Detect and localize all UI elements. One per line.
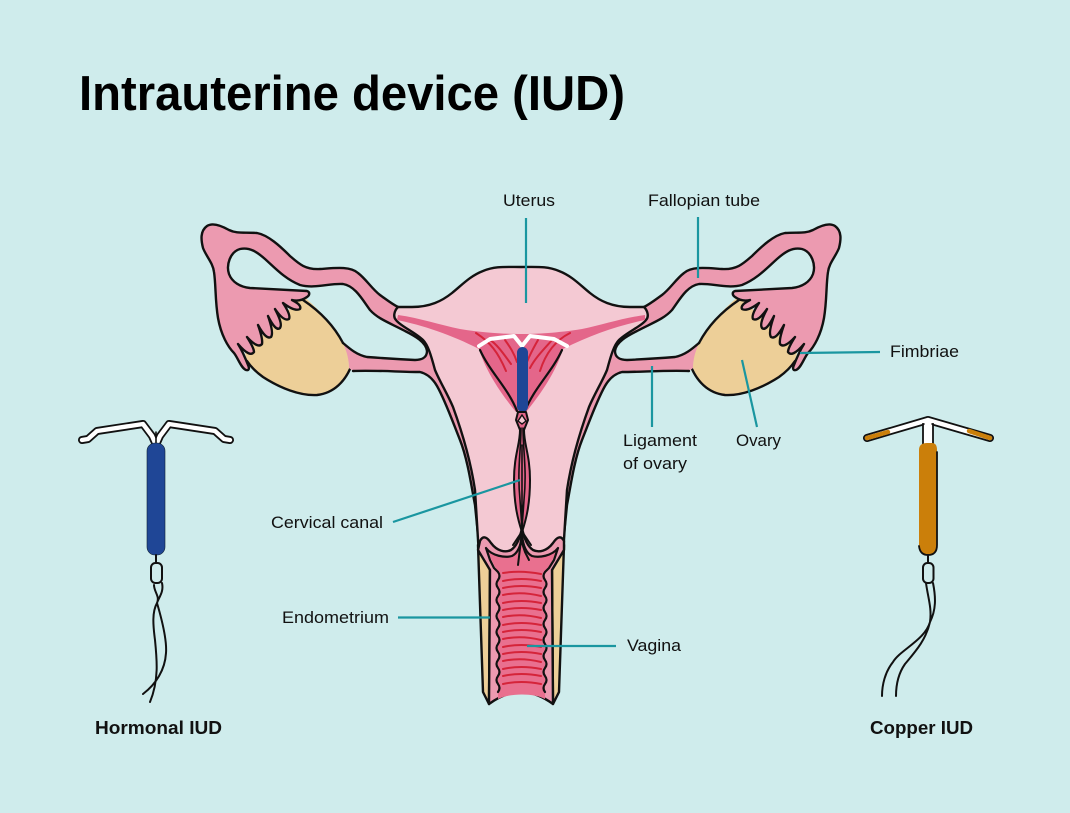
hormonal IUD in place	[479, 336, 567, 412]
cervical canal	[514, 412, 530, 535]
hormonal IUD device	[82, 424, 230, 702]
right fallopian tube, ligament and ovary	[563, 224, 840, 545]
left tan wall layer	[478, 545, 490, 704]
right tan wall layer	[552, 545, 564, 704]
label: Fimbriae: Fimbriae	[890, 343, 959, 361]
label: Ovary: Ovary	[736, 432, 782, 450]
arms white fill	[867, 420, 990, 438]
label: Cervical canal	[271, 480, 520, 532]
rod edge	[919, 452, 937, 555]
label: Vagina: Vagina	[627, 637, 682, 655]
hormone reservoir	[147, 443, 165, 555]
strings	[143, 555, 166, 702]
copper sleeves	[867, 431, 990, 438]
cavity side outlines	[480, 350, 562, 411]
label: Ligament of ovary	[623, 366, 697, 473]
stem top patch	[924, 420, 932, 428]
canal ridges outline	[486, 535, 558, 692]
label: Ligament of ovary: Ligament	[623, 432, 697, 450]
arms outline	[82, 424, 230, 445]
label: Uterus: Uterus	[503, 192, 555, 210]
uterine cavity	[397, 315, 645, 412]
copper rod	[919, 443, 937, 555]
stem	[923, 424, 933, 446]
bead	[151, 563, 162, 583]
left fallopian tube, ligament and ovary	[202, 224, 479, 545]
vaginal canal	[486, 535, 558, 699]
Hormonal IUD caption: Hormonal IUD	[95, 717, 222, 738]
label: Fallopian tube: Fallopian tube	[648, 192, 760, 210]
vaginal pink layer	[478, 528, 564, 704]
cavity red muscle lines	[476, 333, 570, 371]
label: Ovary	[736, 360, 782, 450]
anatomy diagram: uterus and ovaries	[202, 224, 840, 704]
label: Uterus	[503, 192, 555, 303]
label: Ligament of ovary: of ovary	[623, 455, 688, 473]
label: Endometrium: Endometrium	[282, 609, 389, 627]
bead	[923, 563, 934, 583]
stem	[155, 432, 157, 443]
uterus body	[394, 267, 648, 556]
Copper IUD caption: Copper IUD	[870, 717, 973, 738]
copper IUD device	[867, 420, 990, 696]
red rugae lines	[503, 572, 541, 684]
cervix opening lines	[513, 528, 531, 565]
vagina	[478, 528, 564, 704]
title: Intrauterine device (IUD)	[79, 67, 625, 121]
arms outline	[867, 420, 990, 438]
label: Fallopian tube	[648, 192, 760, 278]
arms white fill	[82, 424, 230, 445]
strings	[882, 555, 935, 696]
label: Cervical canal: Cervical canal	[271, 514, 383, 532]
